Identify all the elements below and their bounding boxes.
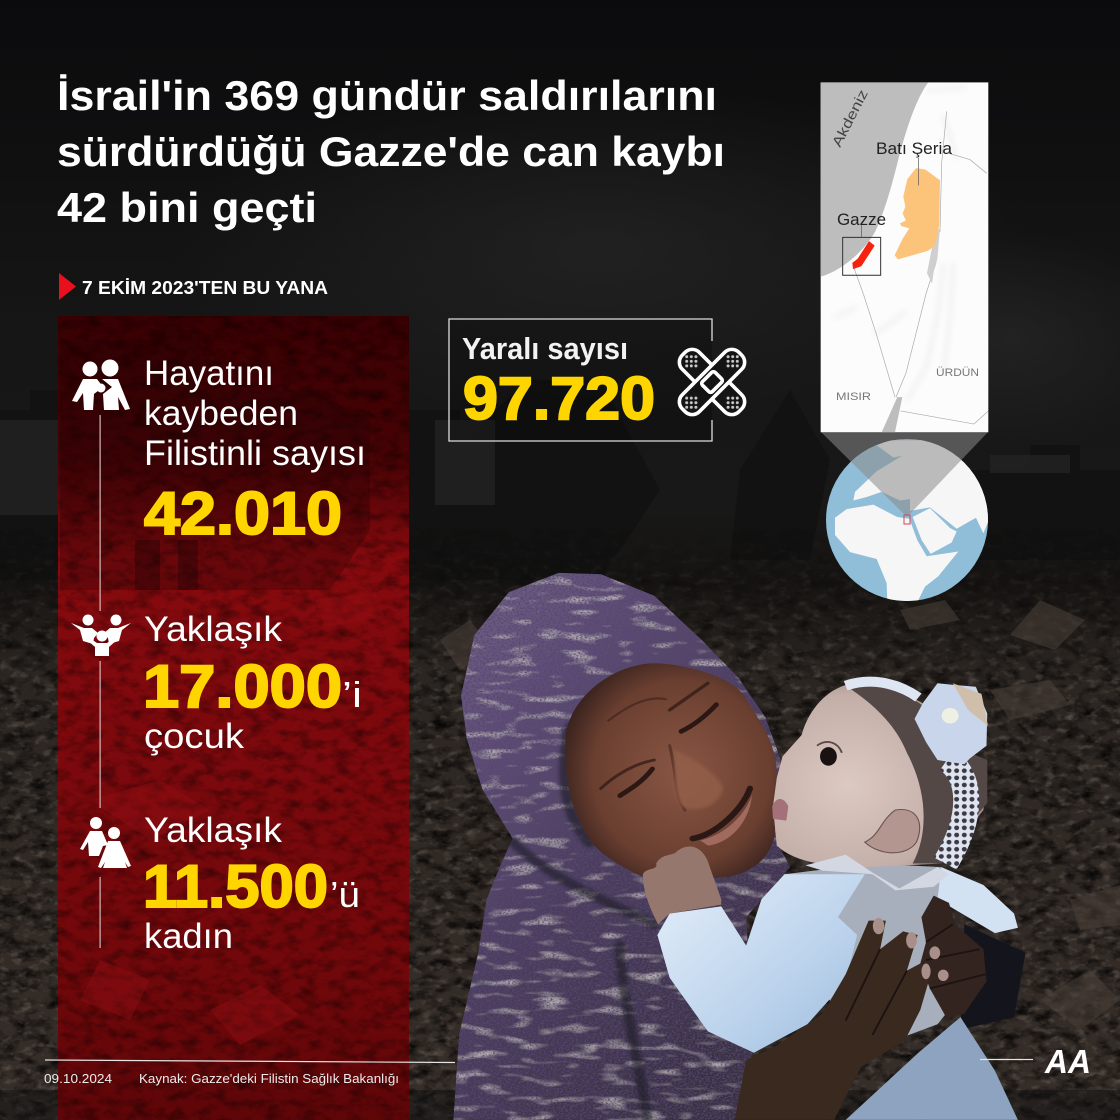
callout frame: [449, 319, 712, 441]
scarf and body: [453, 573, 790, 1120]
baby hand: [643, 846, 721, 924]
number: 17.000: [143, 653, 342, 720]
footer: source: Kaynak: Gazze'deki Filistin Sağlık Bakanlığı: [139, 1072, 399, 1086]
icon: crossed bandages: [675, 345, 749, 419]
headband and flower: [846, 682, 988, 864]
baby body: [784, 864, 960, 1053]
stat: deaths: [72, 354, 366, 611]
text: label: kaybeden: [144, 394, 298, 433]
baby head: [773, 685, 987, 867]
facial features: [601, 683, 750, 839]
number: 97.720: [463, 365, 655, 432]
text: children: çocuk: [144, 717, 245, 756]
locator map: [821, 82, 988, 432]
baby skirt: [846, 1017, 1018, 1120]
connector line: [100, 661, 101, 808]
mother's hand: [735, 921, 932, 1120]
globe: [821, 432, 990, 602]
baby collar: [805, 855, 949, 890]
text: label: Filistinli sayısı: [144, 434, 366, 473]
text: label: [144, 354, 366, 473]
stat: women: [80, 811, 360, 956]
gaza marker: [904, 515, 910, 524]
footer rule: [45, 1060, 1033, 1062]
label: West Bank: Batı Şeria: [876, 139, 953, 158]
number: 42.010: [144, 480, 342, 547]
baby right sleeve: [938, 867, 1018, 933]
funnel to map: [821, 432, 988, 517]
title: sürdürdüğü Gazze'de can kaybı: [57, 128, 725, 175]
icon: family: [72, 360, 130, 410]
label: Yaralı sayısı: [462, 331, 628, 366]
label: Egypt: MISIR: [836, 391, 871, 403]
number: 11.500: [143, 853, 328, 920]
finger gaps and nails: [846, 918, 985, 1035]
suffix: ’i: [342, 674, 362, 715]
icon: women: [80, 817, 131, 868]
logo: AA: AA: [1044, 1043, 1091, 1080]
subheading: date marker: 7 EKİM 2023'TEN BU YANA: [82, 277, 328, 298]
stat: children: [71, 610, 362, 808]
connector line: [100, 415, 101, 611]
baby face details: [772, 742, 920, 853]
subheading: date marker: [59, 273, 328, 300]
face: [565, 663, 777, 881]
callout: wounded: [449, 319, 749, 441]
text: label: Yaklaşık: [144, 811, 283, 850]
black sleeve: [960, 924, 1026, 1030]
title: İsrail'in 369 gündür saldırılarını: [57, 72, 717, 119]
text: label: Hayatını: [144, 354, 274, 393]
icon: children: [71, 614, 131, 656]
label: Gaza: Gazze: [837, 210, 886, 229]
text: label: Yaklaşık: [144, 610, 283, 649]
baby left sleeve: [657, 874, 865, 1053]
photo: mother holding baby: [453, 573, 1026, 1120]
baby hair: [846, 685, 987, 864]
mother's far fingers: [920, 896, 986, 1019]
map of Palestine region: [821, 82, 988, 432]
title: [57, 72, 725, 231]
scarf folds: [513, 728, 654, 1117]
suffix: ’ü: [330, 874, 360, 915]
label: Jordan: ÜRDÜN: [936, 367, 979, 379]
connector line: [100, 877, 101, 948]
label: Akdeniz: Akdeniz: [828, 87, 871, 149]
panel: red casualty column: [58, 316, 409, 1120]
title: 42 bini geçti: [57, 184, 317, 231]
footer: date: 09.10.2024: [44, 1072, 112, 1086]
text: women: kadın: [144, 917, 233, 956]
